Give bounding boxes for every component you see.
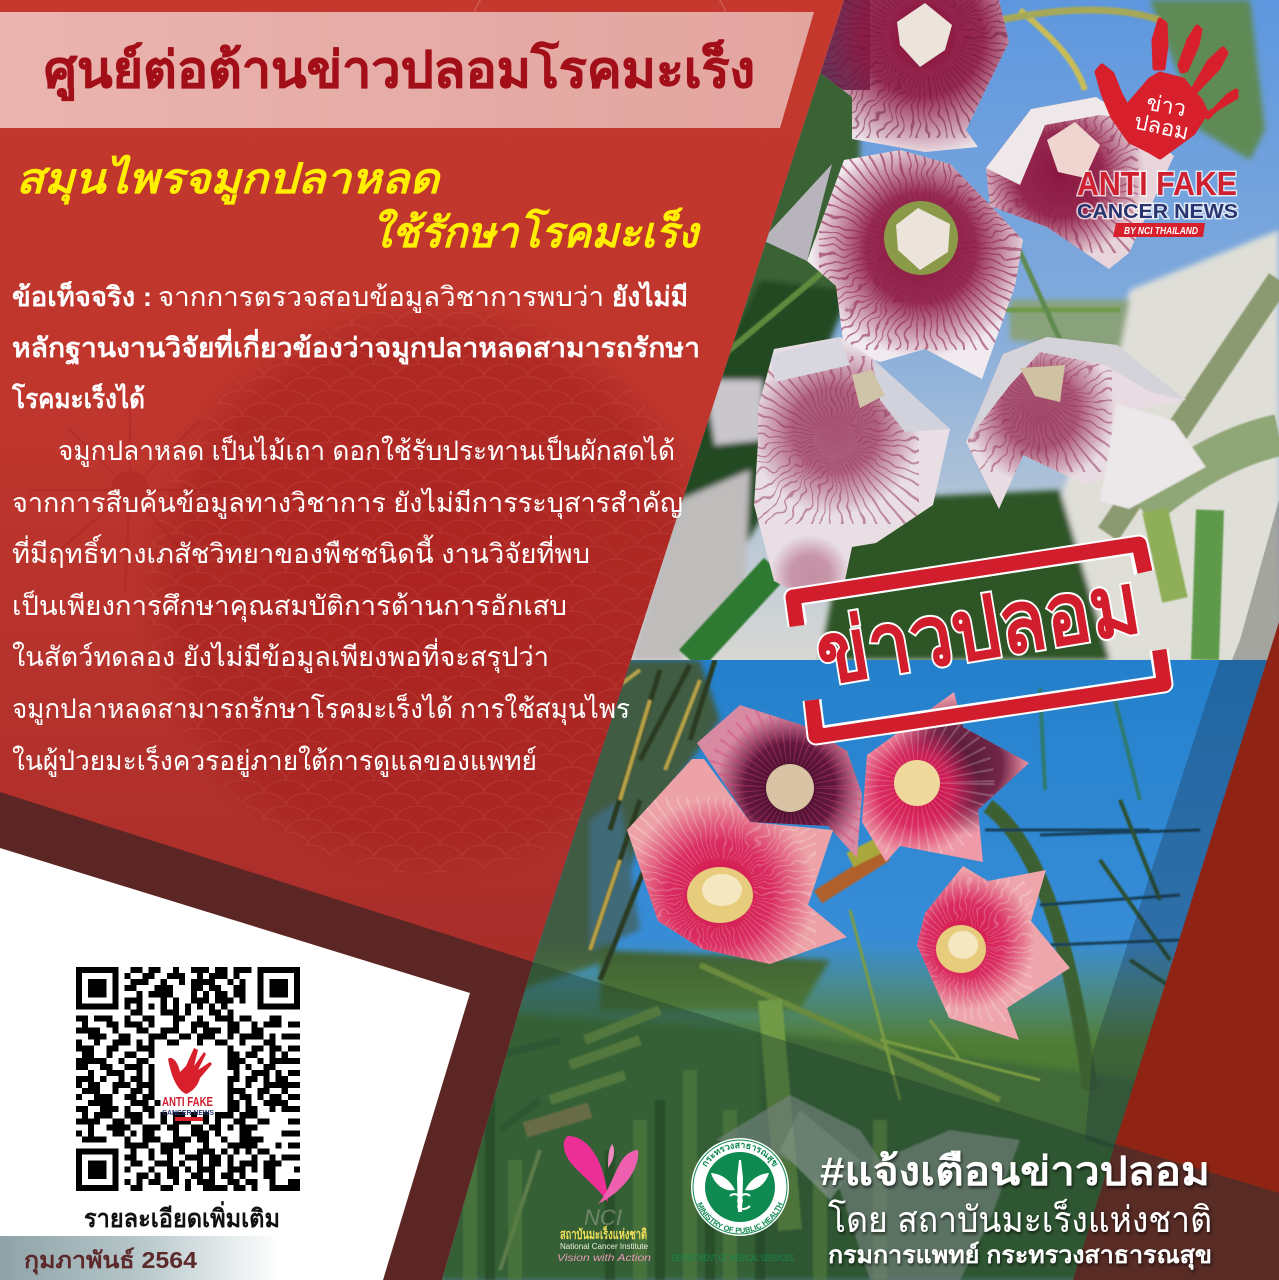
text block: fact check body: จากการสืบค้นข้อมูลทางวิชาการ ยังไม่มีการระบุสารสำคัญ — [12, 488, 683, 520]
text block: fact check body: เป็นเพียงการศึกษาคุณสมบัติการต้านการอักเสบ — [12, 588, 567, 623]
text block: fact check body: จมูกปลาหลดสามารถรักษาโรคมะเร็งได้ การใช้สมุนไพร — [12, 691, 630, 726]
heading: claim: ใช้รักษาโรคมะเร็ง — [371, 207, 701, 256]
flower: lower star — [917, 866, 1070, 1040]
logo: Ministry of Public Health: DEPARTMENT OF MEDICAL SERVICES — [672, 1253, 794, 1263]
logo: National Cancer Institute: NCI — [584, 1205, 622, 1230]
caption: more details: รายละเอียดเพิ่มเติม — [84, 1201, 280, 1233]
text block: fact check body: จมูกปลาหลด เป็นไม้เถา ดอกใช้รับประทานเป็นผักสดได้ — [58, 433, 675, 467]
panel: red triangle lower right — [1115, 622, 1279, 1193]
logo: National Cancer Institute: สถาบันมะเร็งแห่งชาติ — [560, 1225, 647, 1242]
icon: red hand: ข่าว — [1145, 90, 1188, 121]
text block: fact check body — [11, 279, 700, 777]
logo: National Cancer Institute: National Cancer Institute — [560, 1241, 648, 1251]
icon: red hand — [1097, 20, 1236, 157]
icon: red hand: ปลอม — [1132, 109, 1191, 145]
panel: upper flower photo — [620, 0, 1279, 660]
badge: by NCI Thailand: BY NCI THAILAND — [1124, 226, 1198, 237]
text block: fact check body: หลักฐานงานวิจัยที่เกี่ยวข้องว่าจมูกปลาหลดสามารถรักษา — [12, 328, 700, 366]
callout: hashtag and organisation: #แจ้งเตือนข่าวปลอม — [820, 1150, 1210, 1194]
logo: Anti Fake Cancer News — [1077, 20, 1238, 237]
text block: fact check body: ในผู้ป่วยมะเร็งควรอยู่ภายใต้การดูแลของแพทย์ — [12, 743, 537, 777]
detail: stems and grass — [470, 660, 1200, 1280]
panel: white QR card — [0, 848, 470, 1280]
header band — [0, 12, 814, 128]
icon: QR centre logo: ANTI FAKE — [162, 1095, 213, 1109]
flower: lower right bell — [960, 335, 1190, 515]
callout: hashtag and organisation — [820, 1150, 1212, 1271]
petal: grey side — [762, 164, 832, 261]
callout: hashtag and organisation: กรมการแพทย์ กระทรวงสาธารณสุข — [828, 1241, 1212, 1271]
logo: Ministry of Public Health: MINISTRY OF PUBLIC HEALTH — [697, 1202, 783, 1233]
heading: claim — [16, 154, 701, 256]
panel: brown band lower left — [0, 792, 533, 1280]
logo: Ministry of Public Health: กระทรวงสาธารณสุข — [702, 1142, 778, 1167]
text block: fact check body: ที่มีฤทธิ์ทางเภสัชวิทยาของพืชชนิดนี้ งานวิจัยที่พบ — [12, 534, 590, 569]
callout: hashtag and organisation: โดย สถาบันมะเร็งแห่งชาติ — [828, 1197, 1212, 1240]
date band: กุมภาพันธ์ 2564 — [24, 1247, 197, 1275]
text block: fact check body: ข้อเท็จจริง : — [12, 279, 152, 312]
heading: claim: สมุนไพรจมูกปลาหลด — [16, 154, 442, 205]
flower: right bell — [986, 97, 1174, 269]
date band — [0, 1236, 280, 1280]
icon: QR centre logo: CANCER NEWS — [162, 1110, 214, 1117]
text block: fact check body: โรคมะเร็งได้ — [11, 381, 145, 414]
flower: central bell — [807, 150, 1023, 379]
text block: fact check body: ยังไม่มี — [612, 281, 688, 312]
icon: QR centre logo — [162, 1048, 214, 1121]
QR code — [76, 967, 300, 1191]
logo: National Cancer Institute — [557, 1136, 652, 1264]
flower: top bell — [820, 0, 1009, 152]
panel: red background — [0, 0, 900, 1000]
shade: wedge and bottom overlay — [1085, 660, 1267, 1148]
panel: brown triangle lower right — [1073, 1144, 1279, 1280]
flower: maroon star — [697, 705, 862, 858]
flower: left pink star — [627, 759, 847, 964]
flower: lower left bell — [754, 337, 950, 588]
badge: by NCI Thailand — [1113, 223, 1205, 237]
text block: fact check body: ในสัตว์ทดลอง ยังไม่มีข้อมูลเพียงพอที่จะสรุปว่า — [12, 638, 549, 674]
flower: grey bell — [716, 1095, 1020, 1280]
stamp: fake news: ข่าวปลอม — [809, 555, 1147, 704]
logo: National Cancer Institute: Vision with Action — [557, 1253, 652, 1264]
logo: Ministry of Public Health — [672, 1138, 794, 1263]
title: ศูนย์ต่อต้านข่าวปลอมโรคมะเร็ง — [44, 39, 755, 101]
flower: right star — [862, 692, 1029, 862]
text: ANTI FAKE: ANTI FAKE — [1077, 165, 1237, 202]
flower: white bloom — [1100, 404, 1206, 509]
text block: fact check body: จากการตรวจสอบข้อมูลวิชาการพบว่า — [158, 282, 604, 313]
text: CANCER NEWS: CANCER NEWS — [1077, 201, 1238, 223]
panel: lower flower photo — [440, 660, 1279, 1280]
